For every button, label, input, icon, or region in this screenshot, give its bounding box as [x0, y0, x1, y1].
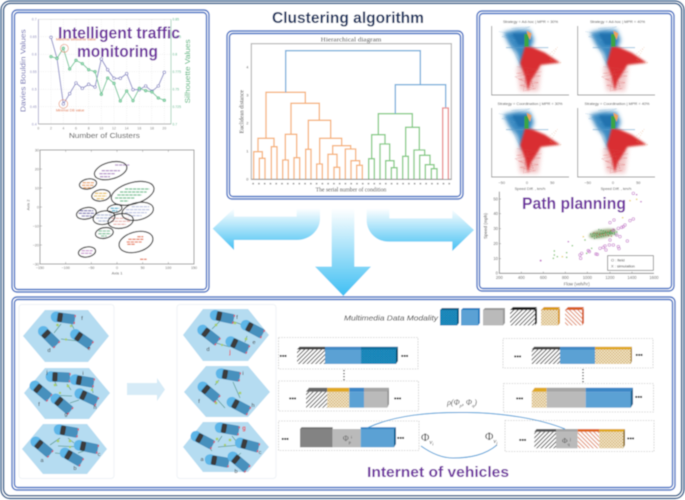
chart: Davies Bouldin and silhouette line chart: 12	[112, 127, 116, 131]
chart: Davies Bouldin and silhouette line chart: 8	[88, 127, 90, 131]
chart: Davies Bouldin and silhouette line chart: 6	[75, 127, 77, 131]
chart: dendrogram: 0	[246, 177, 249, 182]
correlation arcs and labels: ρ(Φ	[447, 398, 460, 407]
correlation arcs and labels: p	[459, 403, 463, 408]
chart: four speed difference scatter plots: −50	[584, 180, 592, 185]
chart: speed versus flow scatter: 0	[496, 271, 499, 276]
chart: Davies Bouldin and silhouette line chart: 0.725	[172, 105, 181, 109]
data rows: right vehicle: Φ	[562, 436, 567, 445]
chart: Davies Bouldin and silhouette line chart: 18	[150, 127, 154, 131]
data rows: left vehicle: •••	[401, 354, 409, 360]
panel: path planning	[477, 11, 674, 291]
chart: Davies Bouldin and silhouette line chart: Silhouette Values	[183, 39, 192, 103]
correlation arcs and labels: i	[432, 442, 434, 446]
chart: Davies Bouldin and silhouette line chart: Davies Bouldin Values	[19, 29, 28, 112]
chart: Davies Bouldin and silhouette line chart: Minimal DB value	[56, 109, 84, 113]
diagram: vehicle clusters before: a	[40, 458, 44, 464]
chart: speed versus flow scatter: 50	[493, 196, 499, 201]
chart: speed versus flow scatter: 40	[493, 211, 499, 216]
chart: cluster ellipses scatter: 150	[191, 266, 197, 270]
chart: speed versus flow scatter: 600	[540, 275, 547, 280]
chart: four speed difference scatter plots: 0	[526, 180, 529, 185]
chart: speed versus flow scatter: 800	[562, 275, 569, 280]
chart: Davies Bouldin and silhouette line chart: 16	[137, 127, 141, 131]
diagram: vehicle clusters after: j	[228, 350, 231, 356]
data rows: right vehicle: •••	[627, 436, 635, 443]
chart: Davies Bouldin and silhouette line chart: 0.75	[172, 88, 179, 92]
heading: Intelligent traffic monitoring	[58, 24, 180, 61]
diagram: vehicle clusters after	[177, 304, 276, 478]
diagram: vehicle clusters before: f	[38, 402, 40, 408]
data rows: right vehicle: j	[569, 436, 571, 442]
chart: cluster ellipses scatter: −150	[36, 266, 44, 270]
heading: Intelligent traffic monitoring: Intelligent traffic	[58, 24, 180, 42]
chart: cluster ellipses scatter: 0	[37, 205, 39, 209]
data rows: left vehicle: Φ	[343, 434, 349, 443]
correlation arcs and labels: Φ	[485, 431, 493, 443]
correlation arcs and labels: v	[493, 438, 496, 445]
chart: speed versus flow scatter: O : field	[611, 257, 625, 262]
chart: Davies Bouldin and silhouette line chart	[19, 18, 192, 140]
data rows: right vehicle: •••	[516, 396, 524, 403]
chart: Davies Bouldin and silhouette line chart: Number of Clusters	[69, 131, 140, 140]
chart: cluster ellipses scatter: Axis 2	[25, 199, 30, 210]
chart: four speed difference scatter plots: Speed Diff. , km/h	[515, 186, 545, 191]
chart: speed versus flow scatter: 1000	[583, 275, 593, 280]
chart: cluster ellipses scatter	[25, 148, 197, 275]
diagram: vehicle clusters before: c	[98, 452, 101, 458]
chart: speed versus flow scatter: 400	[518, 275, 525, 280]
diagram: vehicle clusters after: d	[206, 347, 210, 353]
diagram: vehicle clusters after: f	[198, 399, 200, 405]
diagram: vehicle clusters after: h	[251, 403, 255, 409]
chart: Davies Bouldin and silhouette line chart: 0.55	[30, 70, 37, 74]
chart: cluster ellipses scatter: 10	[35, 186, 39, 190]
chart: four speed difference scatter plots: Strategy = Coordination | MPR = 40%	[584, 101, 650, 106]
chart: cluster ellipses scatter: 100	[165, 266, 171, 270]
chart: cluster ellipses scatter: −100	[62, 266, 70, 270]
data rows: right vehicle: •••	[635, 394, 643, 402]
diagram: vehicle clusters after: f	[236, 315, 238, 321]
chart: dendrogram: Euclidean distance	[240, 90, 246, 133]
panel: intelligent traffic monitoring	[12, 10, 209, 292]
data rows: left vehicle: •••	[394, 396, 402, 403]
chart: Davies Bouldin and silhouette line chart: Maximal silhouette value	[56, 38, 96, 42]
chart: dendrogram: 4	[246, 64, 249, 69]
diagram: vehicle clusters before: f	[81, 316, 83, 322]
chart: Davies Bouldin and silhouette line chart: 0.7	[32, 18, 37, 22]
heading: Clustering algorithm: Clustering algorithm	[272, 10, 424, 27]
diagram: vehicle clusters after: g	[242, 426, 246, 432]
chart: four speed difference scatter plots: Speed Diff. , km/h	[601, 186, 631, 191]
diagram: vehicle clusters after: c	[259, 450, 262, 456]
chart: dendrogram	[240, 36, 451, 193]
panel: hierarchical diagram	[227, 31, 463, 199]
diagram: vehicle clusters before: i	[82, 371, 84, 377]
chart: speed versus flow scatter: Speed (mph)	[483, 213, 488, 239]
data rows: right vehicle: •••	[636, 352, 643, 360]
chart: four speed difference scatter plots: 50	[550, 180, 555, 185]
data rows: left vehicle: •••	[280, 354, 287, 360]
panel: internet of vehicles	[12, 297, 675, 490]
legend: multimedia data modality: Multimedia Data Modality	[344, 314, 439, 322]
correlation arcs and labels: v	[429, 439, 432, 446]
chart: Davies Bouldin and silhouette line chart: 4	[62, 127, 64, 131]
data rows: left vehicle: p	[349, 440, 352, 444]
data rows: left vehicle: •••	[282, 436, 289, 444]
correlation arcs and labels: , Φ	[462, 398, 472, 407]
chart: speed versus flow scatter: 200	[496, 275, 503, 280]
data rows: right vehicle: •••	[514, 354, 522, 361]
chart: four speed difference scatter plots	[492, 19, 655, 191]
chart: four speed difference scatter plots: Strategy = Coordination | MPR = 30%	[497, 101, 563, 106]
chart: Davies Bouldin and silhouette line chart: 0.4	[32, 122, 37, 126]
chart: Davies Bouldin and silhouette line chart: 14	[125, 127, 129, 131]
data rows: left vehicle: •••	[397, 436, 405, 442]
chart: four speed difference scatter plots: 50	[636, 180, 641, 185]
chart: dendrogram: 3	[246, 92, 249, 97]
correlation arcs and labels: q	[472, 403, 475, 408]
chart: dendrogram: 2	[246, 120, 249, 125]
chart: cluster ellipses scatter: Axis 1	[112, 270, 123, 275]
chart: dendrogram: Hierarchical diagram	[321, 36, 381, 43]
diagram: vehicle clusters before	[19, 304, 114, 478]
chart: speed versus flow scatter: 1600	[649, 275, 659, 280]
chart: speed versus flow scatter: 1200	[605, 275, 615, 280]
chart: Davies Bouldin and silhouette line chart: 0.65	[30, 35, 37, 39]
diagram: vehicle clusters before: g	[64, 412, 68, 418]
chart: speed versus flow scatter: X : simulation	[611, 264, 635, 269]
correlation arcs and labels: Φ	[421, 432, 429, 444]
arrow: to traffic monitoring	[213, 208, 320, 250]
heading: Path planning: Path planning	[522, 194, 626, 213]
diagram: vehicle clusters after: i	[242, 371, 244, 377]
chart: Davies Bouldin and silhouette line chart: 0.85	[172, 18, 179, 22]
chart: speed versus flow scatter: 10	[493, 256, 499, 261]
data rows: left vehicle: •••	[289, 396, 297, 403]
chart: Davies Bouldin and silhouette line chart: 10	[99, 127, 103, 131]
chart: cluster ellipses scatter: −10	[33, 224, 39, 228]
diagram: vehicle clusters before: j	[45, 370, 48, 376]
chart: cluster ellipses scatter: −30	[33, 262, 39, 266]
chart: dendrogram: 1	[246, 149, 249, 154]
chart: Davies Bouldin and silhouette line chart: 20	[162, 127, 166, 131]
arrow: clusters transition	[127, 378, 165, 401]
chart: Davies Bouldin and silhouette line chart: 0.45	[30, 105, 37, 109]
chart: four speed difference scatter plots: 0	[612, 180, 615, 185]
diagram: vehicle clusters before: h	[93, 405, 97, 411]
data rows: right vehicle: q	[567, 442, 570, 446]
heading: Intelligent traffic monitoring: monitoring	[77, 43, 158, 61]
chart: four speed difference scatter plots: Strategy = Ad-hoc | MPR = 40%	[590, 19, 646, 24]
chart: speed versus flow scatter: 1400	[627, 275, 637, 280]
chart: cluster ellipses scatter: 20	[35, 167, 39, 171]
chart: cluster ellipses scatter: −50	[88, 266, 94, 270]
chart: speed versus flow scatter	[483, 192, 659, 286]
diagram: vehicle clusters before: b	[73, 466, 77, 472]
chart: cluster ellipses scatter: −20	[33, 243, 39, 247]
chart: speed versus flow scatter: 30	[493, 226, 499, 231]
diagram: vehicle clusters after: a	[200, 457, 204, 463]
data rows: left vehicle	[278, 338, 419, 450]
chart: Davies Bouldin and silhouette line chart: 0.775	[172, 70, 181, 74]
heading: Internet of vehicles: Internet of vehicles	[367, 464, 509, 481]
diagram: vehicle clusters after: e	[252, 340, 256, 346]
chart: Davies Bouldin and silhouette line chart: 0	[37, 127, 39, 131]
chart: Davies Bouldin and silhouette line chart: 2	[50, 127, 52, 131]
correlation arcs and labels	[367, 398, 565, 458]
arrow: to internet of vehicles	[315, 208, 371, 296]
diagram: vehicle clusters before: e	[87, 346, 91, 352]
chart: Davies Bouldin and silhouette line chart: 0.7	[172, 122, 177, 126]
data rows: right vehicle: •••	[519, 438, 527, 444]
chart: cluster ellipses scatter: 0	[116, 266, 118, 270]
chart: Davies Bouldin and silhouette line chart: 0.8	[172, 53, 177, 57]
data rows: left vehicle: i	[351, 434, 353, 440]
data rows: right vehicle	[503, 338, 654, 452]
correlation arcs and labels: j	[495, 440, 498, 446]
correlation arcs and labels: )	[473, 398, 477, 407]
chart: cluster ellipses scatter: 30	[35, 148, 39, 152]
chart: cluster ellipses scatter: 50	[141, 266, 145, 270]
diagram: vehicle clusters after: b	[234, 469, 238, 475]
chart: speed versus flow scatter: 20	[493, 241, 499, 246]
chart: four speed difference scatter plots: −50	[498, 180, 506, 185]
chart: dendrogram: The serial number of condition	[316, 186, 386, 193]
chart: Davies Bouldin and silhouette line chart: 0.5	[32, 88, 37, 92]
chart: Davies Bouldin and silhouette line chart: 0.6	[32, 53, 37, 57]
arrow: to path planning	[367, 208, 474, 251]
chart: four speed difference scatter plots: Strategy = Ad-hoc | MPR = 30%	[503, 19, 559, 24]
legend: multimedia data modality	[344, 307, 584, 326]
chart: speed versus flow scatter: Flow (veh/hr)	[564, 281, 590, 286]
chart: Davies Bouldin and silhouette line chart: 0.825	[172, 35, 181, 39]
diagram: vehicle clusters before: d	[47, 348, 51, 354]
